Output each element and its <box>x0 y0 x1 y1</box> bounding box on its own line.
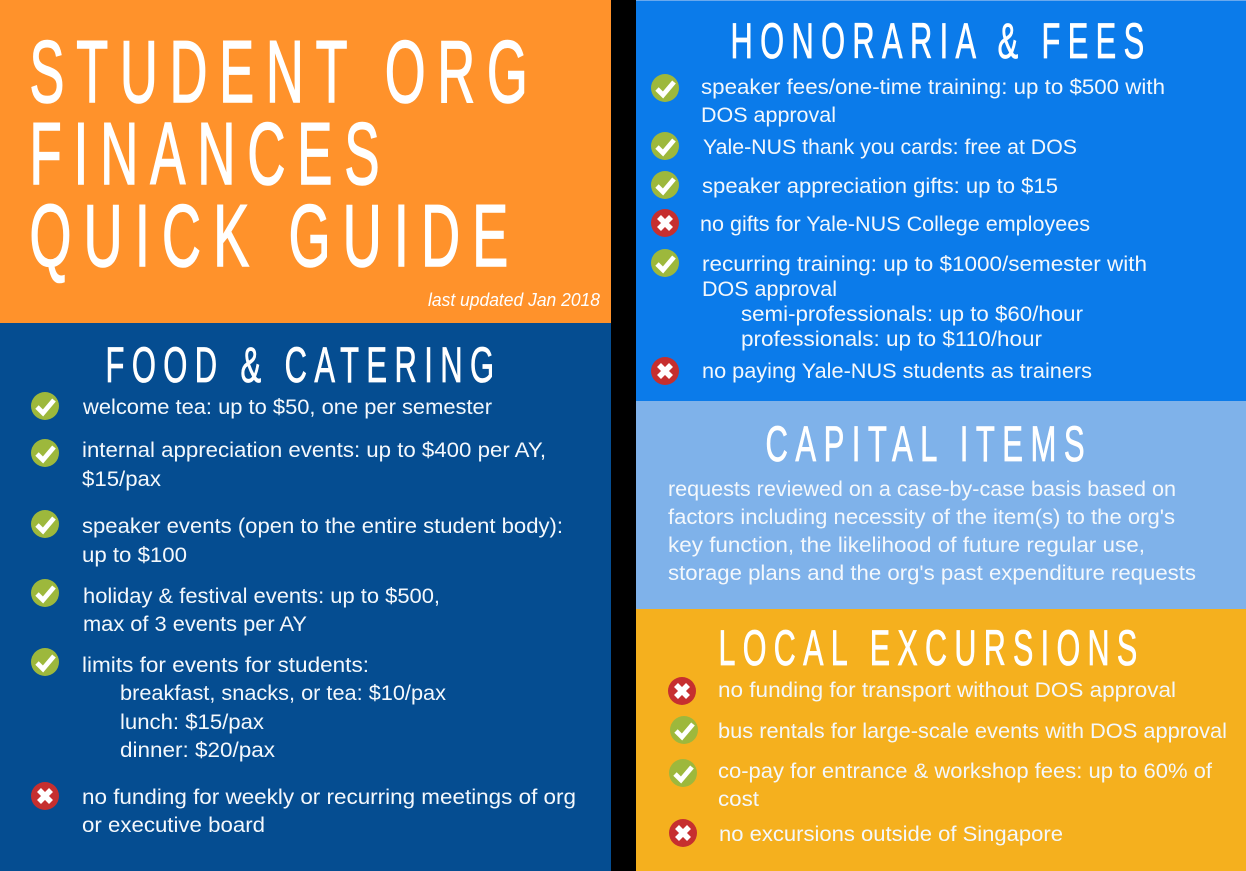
text block: capital items review <box>668 477 1196 585</box>
item: internal appreciation events: internal appreciation events: up to $400 per AY, <box>82 438 546 462</box>
item: no transport funding: no funding for transport without DOS approval <box>718 678 1176 702</box>
item: internal appreciation events: $15/pax <box>82 467 161 491</box>
panel: food and catering <box>0 323 611 871</box>
panel: capital items <box>636 401 1246 609</box>
title: STUDENT ORG <box>30 22 540 121</box>
item: thank you cards: Yale-NUS thank you cards: free at DOS <box>703 135 1077 159</box>
item: speaker fees <box>651 74 1165 127</box>
item: holiday and festival events: max of 3 events per AY <box>83 612 307 636</box>
item: speaker fees: speaker fees/one-time training: up to $500 with <box>701 75 1165 99</box>
title: QUICK GUIDE <box>30 186 520 285</box>
item: no paying students: no paying Yale-NUS students as trainers <box>702 359 1092 383</box>
panel: honoraria and fees <box>636 0 1246 401</box>
item: speaker events: up to $100 <box>82 543 187 567</box>
item: limits for student events: limits for events for students: <box>82 653 369 677</box>
item: recurring training: professionals: up to $110/hour <box>741 327 1042 351</box>
item: holiday and festival events <box>31 579 440 636</box>
last updated note: last updated Jan 2018 <box>428 290 600 310</box>
item: speaker events <box>31 510 563 567</box>
item: recurring training <box>651 249 1147 351</box>
item: welcome tea: welcome tea: up to $50, one per semester <box>82 395 492 419</box>
item: co-pay <box>669 759 1212 811</box>
item: recurring training: semi-professionals: up to $60/hour <box>741 302 1083 326</box>
heading: food and catering: FOOD & CATERING <box>106 337 501 393</box>
item: holiday and festival events: holiday & festival events: up to $500, <box>83 584 440 608</box>
item: co-pay: co-pay for entrance & workshop fees: up to 60% of <box>718 759 1212 783</box>
item: recurring training: recurring training: up to $1000/semester with <box>702 252 1147 276</box>
item: limits for student events: lunch: $15/pax <box>120 710 264 734</box>
title <box>30 22 540 285</box>
text block: capital items review: factors including necessity of the item(s) to the org's <box>668 505 1175 529</box>
item: bus rentals: bus rentals for large-scale events with DOS approval <box>718 719 1227 743</box>
panel: local excursions <box>636 609 1246 871</box>
item: limits for student events <box>31 648 446 762</box>
item: limits for student events: dinner: $20/pax <box>120 738 275 762</box>
item: no overseas excursions: no excursions outside of Singapore <box>719 822 1063 846</box>
item: recurring training: DOS approval <box>702 277 837 301</box>
item: no recurring meeting funding <box>31 782 576 837</box>
item: limits for student events: breakfast, snacks, or tea: $10/pax <box>120 681 446 705</box>
text block: capital items review: key function, the likelihood of future regular use, <box>668 533 1145 557</box>
panel: title <box>0 0 611 323</box>
text block: capital items review: storage plans and the org's past expenditure requests <box>668 561 1196 585</box>
item: no employee gifts: no gifts for Yale-NUS College employees <box>700 212 1090 236</box>
item: no recurring meeting funding: no funding for weekly or recurring meetings of org <box>82 785 576 809</box>
text block: capital items review: requests reviewed on a case-by-case basis based on <box>668 477 1176 501</box>
item: internal appreciation events <box>31 438 546 491</box>
item: co-pay: cost <box>718 787 759 811</box>
item: speaker events: speaker events (open to the entire student body): <box>82 514 563 538</box>
title: FINANCES <box>30 104 392 203</box>
item: appreciation gifts: speaker appreciation gifts: up to $15 <box>702 174 1058 198</box>
item: speaker fees: DOS approval <box>701 103 836 127</box>
item: no recurring meeting funding: or executive board <box>82 813 265 837</box>
